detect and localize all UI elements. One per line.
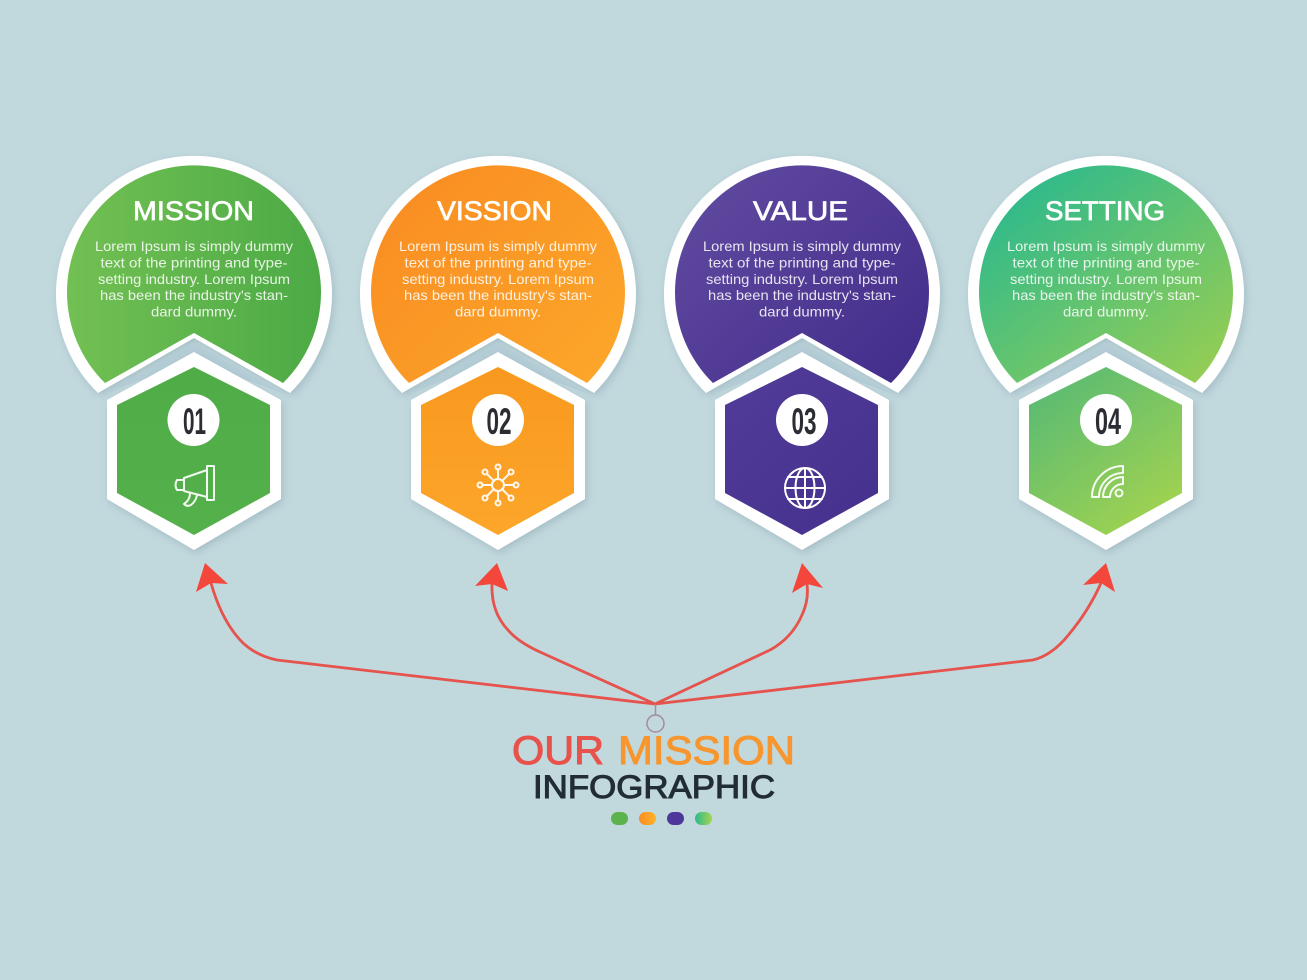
text block: setting: dard dummy. <box>1063 304 1149 320</box>
text block: vission: has been the industry's stan- <box>404 287 592 303</box>
icon: wifi signal <box>1092 466 1123 497</box>
text block: vission <box>399 238 597 320</box>
legend dots <box>611 812 712 825</box>
text block: mission: setting industry. Lorem Ipsum <box>98 271 290 287</box>
icon: network <box>478 464 518 506</box>
heading: vission: VISSION <box>437 196 552 226</box>
heading: setting: SETTING <box>1045 196 1165 226</box>
panel: mission <box>56 156 332 550</box>
title <box>512 729 795 805</box>
number badge: 03: 03 <box>792 401 816 442</box>
hexagon: mission <box>107 352 281 550</box>
text block: setting <box>1007 238 1205 320</box>
text block: mission: dard dummy. <box>151 304 237 320</box>
text block: value <box>703 238 901 320</box>
text block: mission <box>95 238 293 320</box>
text block: vission: text of the printing and type- <box>404 254 592 270</box>
number badge: 01 <box>168 394 220 446</box>
arrow: to vission <box>475 563 655 704</box>
circle panel: vission <box>360 156 636 394</box>
text block: mission: Lorem Ipsum is simply dummy <box>95 238 293 254</box>
text block: mission: has been the industry's stan- <box>100 287 288 303</box>
icon: megaphone <box>176 466 214 506</box>
text block: vission: Lorem Ipsum is simply dummy <box>399 238 597 254</box>
text block: value: Lorem Ipsum is simply dummy <box>703 238 901 254</box>
text block: value: text of the printing and type- <box>708 254 896 270</box>
number badge: 04: 04 <box>1095 401 1121 442</box>
circle panel: setting <box>968 156 1244 394</box>
text block: vission: setting industry. Lorem Ipsum <box>402 271 594 287</box>
hexagon: setting <box>1019 352 1193 550</box>
text block: setting: has been the industry's stan- <box>1012 287 1200 303</box>
number badge: 02: 02 <box>486 401 512 442</box>
text block: mission: text of the printing and type- <box>100 254 288 270</box>
title: MISSION <box>618 729 795 773</box>
text block: setting: text of the printing and type- <box>1012 254 1200 270</box>
text block: value: has been the industry's stan- <box>708 287 896 303</box>
text block: vission: dard dummy. <box>455 304 541 320</box>
panel: value <box>664 156 940 550</box>
text block: value: dard dummy. <box>759 304 845 320</box>
hexagon: value <box>715 352 889 550</box>
arrow: to setting <box>655 563 1115 704</box>
text block: value: setting industry. Lorem Ipsum <box>706 271 898 287</box>
number badge: 04 <box>1080 394 1132 446</box>
title: INFOGRAPHIC <box>533 769 775 805</box>
hexagon: vission <box>411 352 585 550</box>
heading: value: VALUE <box>753 196 848 226</box>
origin node <box>647 704 664 732</box>
arrow: to mission <box>196 563 655 704</box>
panel: vission <box>360 156 636 550</box>
arrows <box>196 563 1115 704</box>
text block: setting: Lorem Ipsum is simply dummy <box>1007 238 1205 254</box>
number badge: 01: 01 <box>183 401 206 442</box>
icon: globe <box>785 468 825 508</box>
circle panel: value <box>664 156 940 394</box>
text block: setting: setting industry. Lorem Ipsum <box>1010 271 1202 287</box>
number badge: 03 <box>776 394 828 446</box>
panel: setting <box>968 156 1244 550</box>
title: OUR <box>512 729 604 773</box>
heading: mission: MISSION <box>133 196 254 226</box>
circle panel: mission <box>56 156 332 394</box>
arrow: to value <box>655 563 823 704</box>
number badge: 02 <box>472 394 524 446</box>
